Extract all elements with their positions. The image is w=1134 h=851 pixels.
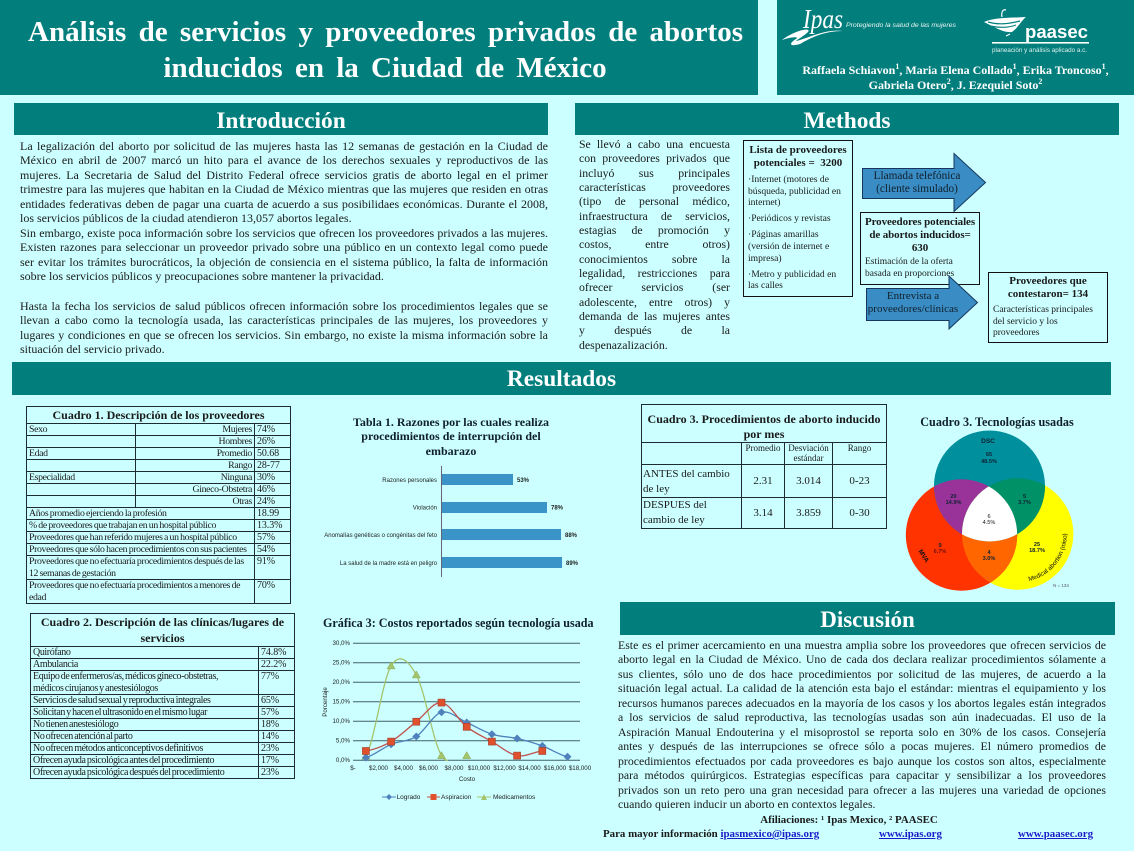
- labels: 4.5%: [983, 520, 995, 526]
- text block: discussion: para métodos quirúrgicos. Estrategias específicas para capacitar y sensibilizar a los proveedores: [618, 768, 1106, 782]
- table: Cuadro 1: 12 semanas de gestación: [29, 568, 116, 578]
- labels: Medical abortion (miso): [1028, 534, 1068, 581]
- text block: introduction: entidades federativas deben de pagar una cuarta de acuerdo a sus posibilidaes económicas. Durante el 2008,: [20, 197, 548, 211]
- arrow: phone call: [862, 152, 986, 212]
- labels: 48.5%: [981, 459, 997, 465]
- bar: Salud de la madre: La salud de la madre está en peligro: [340, 561, 438, 567]
- labels: 6: [987, 514, 991, 520]
- text block: introduction: La legalización del aborto por solicitud de las mujeres hasta las 12 semanas de gestación en la Ciudad de: [20, 138, 548, 152]
- text block: introduction: situación del servicio privado.: [20, 342, 165, 356]
- table: Cuadro 1: 28-77: [257, 460, 280, 471]
- table: Cuadro 1: 54%: [257, 544, 275, 555]
- bar: Violación: [413, 502, 564, 513]
- labels: 65: [986, 452, 992, 458]
- y axis labels: 15,0%: [332, 698, 350, 706]
- table: Cuadro 3: Promedio: [746, 443, 780, 453]
- authors: Raffaela Schiavon1, Maria Elena Collado1, Erika Troncoso1,: [802, 62, 1109, 77]
- text block: introduction: México en abril de 2007 marcó un hito para el avance de los derechos sexuales y reproductivos de las: [20, 153, 548, 167]
- table: Cuadro 2: [30, 613, 295, 779]
- heading: Methods: Methods: [803, 108, 891, 134]
- x axis labels: $16,000: [544, 765, 567, 772]
- x axis labels: $6,000: [419, 765, 439, 772]
- y axis labels: 0,0%: [336, 757, 350, 764]
- footer: contact links: www.ipas.org: [879, 828, 942, 840]
- y axis labels: [332, 640, 350, 764]
- bullet list: ·Páginas amarillas: [748, 229, 819, 240]
- labels: 18.7%: [1029, 548, 1045, 554]
- table: Cuadro 1: 26%: [257, 436, 275, 447]
- logo: paasec: paasec: [1025, 22, 1088, 42]
- labels: 3.0%: [983, 556, 995, 562]
- arrow label: phone call: (cliente simulado): [876, 183, 958, 195]
- box heading: Proveedores que: [1009, 275, 1087, 287]
- legend: Aspiracion: [441, 794, 472, 801]
- table: Cuadro 2: 23%: [261, 743, 279, 754]
- x axis labels: $18,000: [569, 765, 592, 772]
- text block: introduction: [20, 138, 548, 356]
- labels: 9: [938, 543, 942, 549]
- labels: 6.7%: [934, 549, 946, 555]
- table: Cuadro 1: Proveedores que han referido mujeres a un hospital público: [29, 532, 237, 543]
- labels: 4: [987, 550, 991, 556]
- bar: Violación: Violación: [413, 506, 437, 512]
- bullet list: (versión de internet e: [748, 241, 829, 252]
- text block: introduction: llevan a cabo como la tecnología usada, las características principales de las mujeres, los proveedores y: [20, 313, 548, 327]
- text block: introduction: sobre los servicios públicos y preocupaciones sobre mantener la privacidad.: [20, 269, 384, 283]
- table: Cuadro 3: DESPUES del cambio de ley: [643, 499, 707, 526]
- table: Cuadro 3: 0-30: [849, 506, 870, 518]
- bullet list: las calles: [748, 280, 783, 291]
- text block: introduction: ser evitar los trámites burocráticos, la objeción de consiencia en el sistema público, la falta de información: [20, 255, 548, 269]
- arrow label: phone call: Llamada telefónica: [874, 170, 960, 182]
- table: Cuadro 2: 77%: [261, 671, 279, 682]
- text block: discussion: sus clientes, sólo uno de dos hace procedimientos por solicitud de las mujeres, de acuerdo a la: [618, 667, 1106, 681]
- table: Cuadro 2: Servicios de salud sexual y reproductiva integrales: [33, 695, 211, 706]
- arrow label: interview: proveedores/clínicas: [868, 302, 958, 314]
- table: Cuadro 3: Rango: [848, 443, 871, 453]
- text block: introduction: lugares y condiciones en que se ofrecen los servicios. Sin embargo, no existe la misma información sobre la: [20, 328, 548, 342]
- box note: Características principales: [993, 305, 1093, 315]
- table: Cuadro 1: Hombres: [219, 436, 252, 447]
- arrow: interview: [866, 275, 978, 330]
- heading: Tabla 1: procedimientos de interrupción del: [361, 429, 541, 443]
- legend: Logrado: [396, 794, 421, 801]
- legend: [382, 794, 536, 801]
- heading: Tabla 1: embarazo: [426, 444, 476, 458]
- box note: Estimación de la oferta: [865, 257, 953, 267]
- table: Cuadro 2: Quirófano: [33, 647, 70, 658]
- table: Cuadro 2: No ofrecen métodos anticonceptivos definitivos: [33, 743, 203, 754]
- table: Cuadro 3: 2.31: [753, 474, 773, 486]
- title panel: [0, 0, 758, 95]
- text block: introduction: Sin embargo, existe poca información sobre los servicios que ofrecen los proveedores privados a las mujeres.: [20, 226, 548, 240]
- table: Cuadro 1: 24%: [257, 496, 275, 507]
- box heading: Proveedores potenciales: [865, 216, 975, 228]
- table: Cuadro 1: Rango: [228, 460, 252, 471]
- table: Cuadro 1: 50.68: [257, 448, 279, 459]
- bar: Anomalías: Anomalías genéticas o congénitas del feto: [324, 533, 438, 539]
- heading: Methods: [575, 103, 1119, 135]
- text block: methods: incluyó sus principales: [579, 166, 730, 180]
- text block: introduction: los servicios públicos de la ciudad atendieron 13,057 abortos legales.: [20, 211, 352, 225]
- table: Cuadro 1: % de proveedores que trabajan en un hospital público: [29, 520, 216, 531]
- table: Cuadro 2: 22.2%: [261, 659, 286, 670]
- bullet list: ·Periódicos y revistas: [748, 213, 831, 224]
- line chart: costs: [322, 640, 592, 801]
- table: Cuadro 2: 18%: [261, 719, 279, 730]
- box heading: [749, 144, 847, 169]
- table: Cuadro 1: Sexo: [29, 424, 47, 435]
- authors and logos panel: [777, 0, 1134, 95]
- table: Cuadro 3: 3.014: [796, 474, 821, 486]
- logo: Ipas: Ipas: [802, 4, 843, 34]
- box note: proveedores: [993, 328, 1039, 338]
- bullet list: búsqueda, publicidad en: [748, 186, 841, 197]
- text block: methods: (tipo de personal médico,: [579, 194, 730, 208]
- bar chart: reasons: [324, 466, 579, 577]
- table: Cuadro 1: edad: [29, 592, 46, 602]
- heading: Resultados: [12, 362, 1111, 395]
- legend: Medicamentos: [493, 794, 536, 801]
- table: Cuadro 1: 13.3%: [257, 520, 282, 531]
- table: Cuadro 1: Cuadro 1. Descripción de los proveedores: [52, 408, 264, 422]
- bar: Anomalías: [324, 529, 578, 540]
- bullet list: ·Internet (motores de: [748, 174, 829, 185]
- table: Cuadro 2: 14%: [261, 731, 279, 742]
- circles: [906, 430, 1073, 591]
- table: Cuadro 1: Otras: [233, 496, 252, 507]
- table: Cuadro 1: 91%: [257, 556, 275, 567]
- table: Cuadro 2: Ambulancia: [33, 659, 78, 670]
- table: Cuadro 2: médicos cirujanos y anestesiólogos: [33, 682, 158, 694]
- text block: methods: conocimientos sobre la: [579, 252, 730, 266]
- box note: [865, 257, 954, 279]
- text block: discussion: recursos humanos pareces adecuados en la mayoría de los casos y los abortos legales están integrados: [618, 696, 1106, 710]
- table: Cuadro 1: Promedio: [217, 448, 252, 459]
- arrow label: interview: Entrevista a: [887, 290, 939, 302]
- table: Cuadro 2: Cuadro 2. Descripción de las clínicas/lugares de servicios: [41, 615, 284, 645]
- table: Cuadro 2: 57%: [261, 707, 279, 718]
- table: Cuadro 1: Mujeres: [222, 424, 252, 435]
- title line two: inducidos en la Ciudad de México: [163, 52, 607, 84]
- text block: introduction: trimestre para las mujeres que habitan en la Ciudad de México mientras que las mujeres que residen en otras: [20, 182, 548, 196]
- table: Cuadro 2: 65%: [261, 695, 279, 706]
- x axis labels: $12,000: [493, 765, 516, 772]
- table: Cuadro 1: Proveedores que no efectuaría procedimientos a menores de: [29, 580, 240, 591]
- y axis labels: 5,0%: [336, 738, 350, 744]
- panel: potential induced abortion providers: [860, 212, 980, 285]
- box note: del servicio y los: [993, 317, 1058, 327]
- text block: methods: y después de la: [579, 323, 730, 337]
- labels: 20: [950, 494, 957, 500]
- series: Aspiración: [362, 699, 546, 759]
- heading: Cuadro 3 Tecnologías: Cuadro 3. Tecnologías usadas: [920, 415, 1074, 429]
- text block: methods: ofrecer servicios (ser: [579, 280, 730, 294]
- x axis labels: $8,000: [445, 765, 464, 772]
- x axis labels: $2,000: [369, 765, 389, 772]
- box heading: contestaron= 134: [1008, 288, 1088, 300]
- text block: discussion: [618, 638, 1106, 811]
- text block: methods: despenazalización.: [579, 338, 668, 352]
- table: Cuadro 3: 0-23: [849, 474, 870, 486]
- icon: Ipas and paasec logos: [782, 4, 1089, 54]
- y axis labels: 30,0%: [332, 640, 350, 647]
- axis titles: [322, 687, 476, 783]
- text block: discussion: cuando quieren inducir un aborto en contextos legales.: [618, 797, 875, 811]
- x axis labels: $10,000: [468, 765, 491, 772]
- y axis labels: 25,0%: [332, 660, 350, 666]
- table: Cuadro 2: Solicitan y hacen el ultrasonido en el mismo lugar: [33, 707, 207, 718]
- table: Cuadro 1: Edad: [29, 448, 48, 459]
- arrow label: phone call: [874, 170, 960, 195]
- axis titles: Porcentaje: [322, 687, 329, 717]
- text block: methods: [579, 137, 730, 352]
- table: Cuadro 1: Años promedio ejerciendo la profesión: [29, 508, 167, 519]
- table: Cuadro 2: 74.8%: [261, 647, 286, 658]
- heading: Tabla 1: Tabla 1. Razones por las cuales realiza: [353, 415, 549, 429]
- text block: discussion: aborto legal en la Ciudad de México. Uno de cada dos declara realizar procedimientos sólamente a: [618, 652, 1106, 666]
- heading: Resultados: Resultados: [507, 366, 616, 392]
- heading: Tabla 1: [353, 415, 549, 458]
- text block: methods: Se llevó a cabo una encuesta: [579, 137, 730, 151]
- logo: paasec: [984, 10, 1089, 54]
- table: Cuadro 3: 3.859: [796, 506, 821, 518]
- panel: list of potential providers: [743, 140, 853, 297]
- table: Cuadro 1: 74%: [257, 424, 275, 435]
- box note: basada en proporciones: [865, 269, 954, 279]
- logo: Ipas: Protegiendo la salud de las mujeres: [846, 22, 957, 29]
- table: Cuadro 1: 57%: [257, 532, 275, 543]
- box heading: de abortos inducidos=: [869, 229, 971, 241]
- labels: 25: [1034, 542, 1040, 548]
- series: Logrado: [362, 708, 572, 762]
- logo: paasec: planeación y análisis aplicado a.c.: [992, 47, 1087, 54]
- box heading: [865, 216, 975, 254]
- axis titles: Costo: [459, 776, 476, 783]
- text block: introduction: Existen razones para seleccionar un proveedor privado sobre una público en un contexto legal como puede: [20, 240, 548, 254]
- bar: Salud de la madre: 89%: [566, 561, 579, 567]
- bar: Razones personales: [382, 474, 530, 485]
- table: Cuadro 2: Ofrecen ayuda psicológica después del procedimiento: [33, 767, 224, 778]
- table: Cuadro 1: 46%: [257, 484, 275, 495]
- text block: introduction: Hasta la fecha los servicios de salud públicos ofrecen información sobre los procedimientos legales que se: [20, 299, 548, 313]
- text block: methods: demanda de las mujeres antes: [579, 309, 730, 323]
- bar: Razones personales: Razones personales: [382, 478, 437, 484]
- table: Cuadro 1: Gineco-Obstetra: [192, 484, 252, 495]
- table: Cuadro 1: Proveedores que sólo hacen procedimientos con sus pacientes: [29, 544, 247, 555]
- footer: contact links: www.paasec.org: [1018, 828, 1093, 840]
- footer: contact links: [603, 828, 1093, 840]
- table: Cuadro 1: Especialidad: [29, 472, 75, 483]
- table: Cuadro 2: Equipo de enfermeros/as, médicos gineco-obstetras,: [33, 671, 218, 682]
- title line one: Análisis de servicios y proveedores privados de abortos: [28, 16, 743, 48]
- labels: N = 134: [1053, 583, 1069, 588]
- authors: Gabriela Otero2, J. Ezequiel Soto2: [869, 76, 1042, 92]
- table: Cuadro 1: [26, 406, 291, 604]
- text block: methods: legalidad, restricciones para: [579, 266, 730, 280]
- y axis labels: 20,0%: [332, 679, 350, 686]
- table: Cuadro 3: ANTES del cambio de ley: [643, 468, 730, 495]
- box heading: Lista de proveedores: [749, 144, 847, 156]
- labels: 14.9%: [946, 500, 961, 506]
- labels: 3.7%: [1018, 500, 1031, 506]
- heading: Introducción: [14, 103, 548, 135]
- text block: discussion: situación legal actual. La calidad de la atención esta bajo el estándar: mientras el equipamiento y los: [618, 681, 1106, 695]
- table: Cuadro 1: 18.99: [257, 508, 279, 519]
- text block: discussion: antes y después de las interrupciones se ofrece sólo a pocas mujeres. El número promedios de: [618, 739, 1106, 753]
- text block: methods: adolescente, entre otros) y: [579, 295, 730, 309]
- labels: [917, 438, 1069, 588]
- heading: Discusión: [620, 602, 1115, 635]
- table: Cuadro 1: 70%: [257, 580, 275, 591]
- text block: methods: características proveedores: [579, 180, 730, 194]
- box note: [993, 305, 1093, 338]
- bar: Salud de la madre: [340, 557, 579, 568]
- table: Cuadro 3: 3.14: [753, 506, 773, 518]
- panel: providers who answered: [988, 272, 1108, 343]
- labels: DSC: [981, 438, 995, 445]
- table: Cuadro 2: No ofrecen atención al parto: [33, 731, 132, 742]
- x axis labels: $4,000: [394, 765, 414, 772]
- labels: 5: [1023, 494, 1026, 500]
- text block: introduction: mujeres. La Secretaria de Salud del Distrito Federal ofrece servicios gratis de aborto legal en el primer: [20, 168, 548, 182]
- table: Cuadro 2: 23%: [261, 767, 279, 778]
- heading: Introducción: Introducción: [216, 108, 346, 134]
- text block: discussion: Este es el primer acercamiento en una muestra amplia sobre los proveedores que ofrecen servicios de: [618, 638, 1106, 652]
- text block: discussion: procedimientos efectuados por cada proveedores es bajo aunque los costos son altos, especialmente: [618, 754, 1106, 768]
- table: Cuadro 1: Proveedores que no efectuaría procedimientos después de las: [29, 556, 244, 567]
- table: Cuadro 1: 30%: [257, 472, 275, 483]
- text block: discussion: a los servicios de salud reproductiva, las tecnologías usadas son aún inadecuadas. El uso de la: [618, 710, 1106, 724]
- labels: MVA: [917, 548, 930, 564]
- footer: contact links: Para mayor información ipasmexico@ipas.org: [603, 828, 819, 840]
- x axis labels: [350, 765, 592, 772]
- text block: methods: con proveedores privados que: [579, 151, 730, 165]
- bullet list: internet): [748, 197, 780, 208]
- box heading: [1008, 275, 1088, 300]
- text block: methods: infraestructura de servicios,: [579, 209, 730, 223]
- table: Cuadro 3: Desviación estándar: [788, 443, 829, 463]
- bar: Anomalías: 88%: [565, 533, 578, 539]
- logo: Ipas: [782, 4, 957, 45]
- y axis labels: 10,0%: [332, 718, 350, 725]
- bullet list: [748, 174, 841, 291]
- x axis labels: $14,000: [518, 765, 541, 772]
- x axis labels: $-: [350, 765, 356, 772]
- bullet list: impresa): [748, 253, 782, 264]
- authors: [802, 62, 1109, 92]
- table: Cuadro 1: Ninguna: [221, 472, 252, 483]
- text block: methods: costos, entre otros): [579, 237, 730, 251]
- text block: methods: estagias de promoción y: [579, 223, 730, 237]
- text block: discussion: privados son un reto pero una gran necesidad para ofrecer a las mujeres una variedad de opciones: [618, 783, 1106, 797]
- table: Cuadro 2: No tienen anestesiólogo: [33, 719, 118, 730]
- table: Cuadro 3: [641, 404, 887, 529]
- heading: Gráfica 3: Gráfica 3: Costos reportados según tecnología usada: [323, 616, 594, 630]
- bar: Razones personales: 53%: [517, 478, 530, 484]
- series: Medicamentos: [362, 659, 471, 760]
- venn diagram: technologies: [906, 430, 1074, 591]
- table: Cuadro 2: Ofrecen ayuda psicológica antes del procedimiento: [33, 755, 214, 766]
- bar: Violación: 78%: [551, 506, 564, 512]
- text block: discussion: Aspiración Manual Endouterina y el misoprostol se reporta solo en 30% de los casos. Consejería: [618, 725, 1106, 739]
- table: Cuadro 3: Cuadro 3. Procedimientos de aborto inducido por mes: [648, 412, 880, 441]
- arrow label: interview: [868, 290, 958, 314]
- table: Cuadro 2: 17%: [261, 755, 279, 766]
- bullet list: ·Metro y publicidad en: [748, 269, 836, 280]
- footer: affiliations: Afiliaciones: ¹ Ipas Mexico, ² PAASEC: [760, 814, 938, 826]
- box heading: 630: [912, 242, 928, 254]
- heading: Discusión: Discusión: [820, 607, 915, 632]
- box heading: potenciales = 3200: [754, 157, 842, 169]
